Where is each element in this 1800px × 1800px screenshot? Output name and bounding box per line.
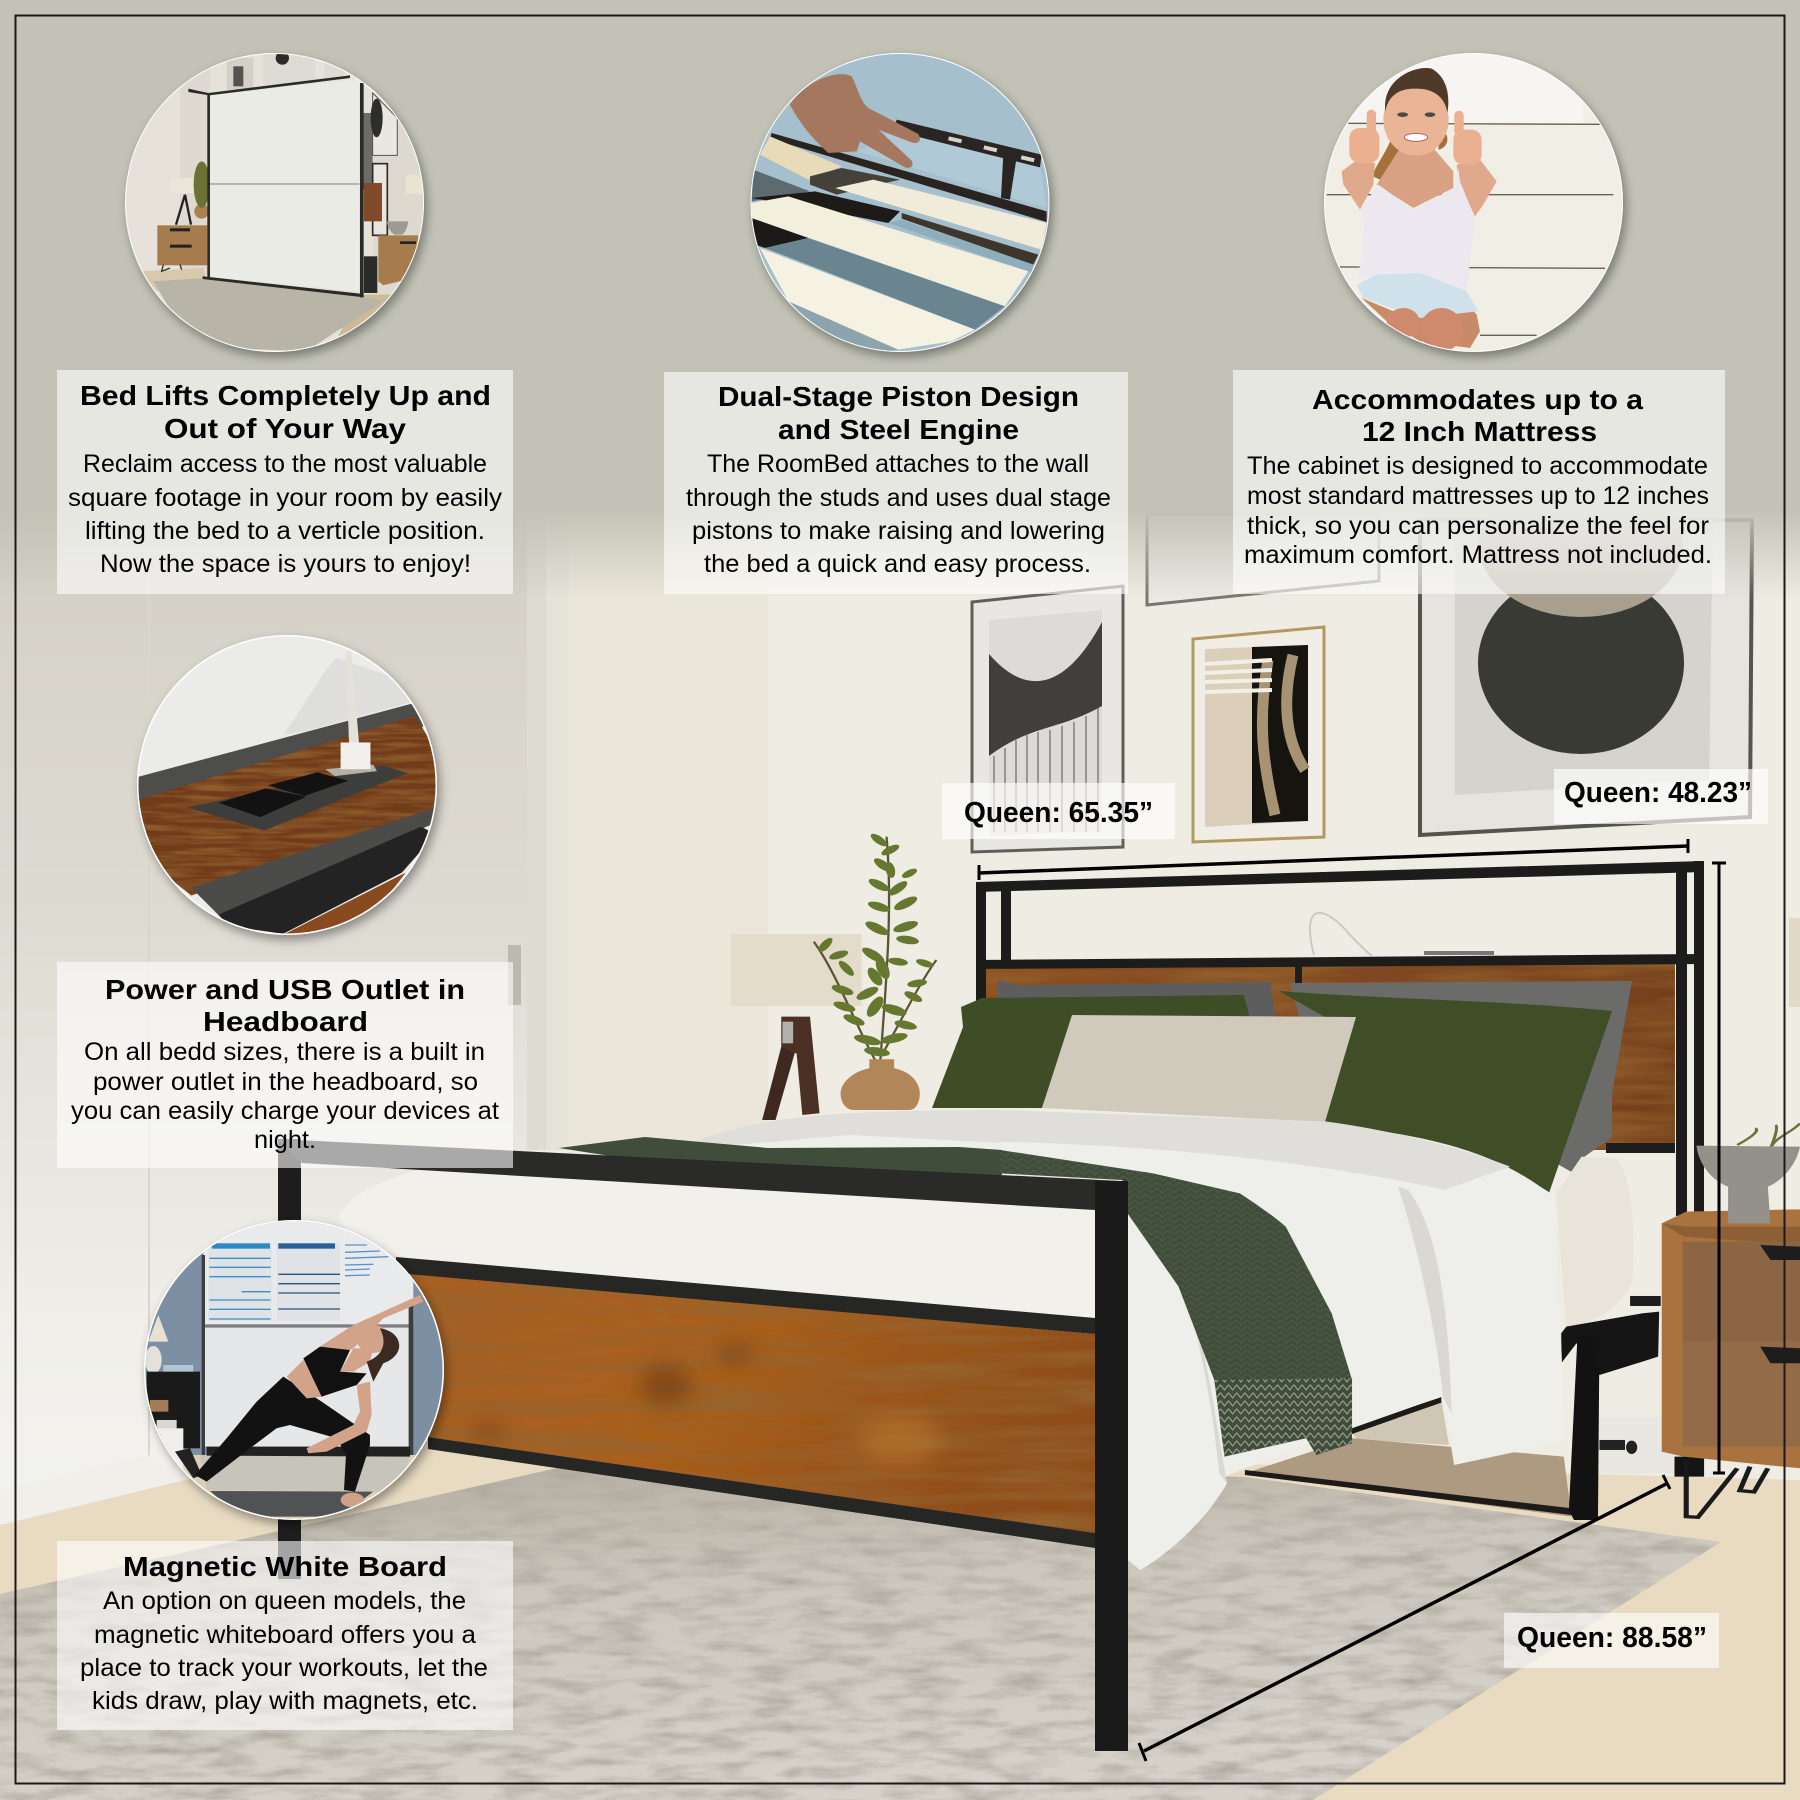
circle photo: slats and piston frame (745, 48, 1055, 358)
label: height dimension: Queen: 48.23” (1564, 777, 1752, 809)
body text: dual-stage piston: the bed a quick and easy process. (704, 550, 1091, 578)
heading: power outlet: Power and USB Outlet in (105, 974, 465, 1005)
body text: mattress: maximum comfort. Mattress not included. (1244, 541, 1712, 569)
duvet (339, 1110, 1564, 1570)
body text: magnetic white board: An option on queen models, the (103, 1587, 466, 1615)
heading: mattress (1312, 384, 1643, 447)
floor (0, 1440, 1800, 1800)
heading: mattress: 12 Inch Mattress (1362, 416, 1597, 447)
heading: bed lifts: Out of Your Way (164, 413, 406, 444)
heading: power outlet (105, 974, 465, 1037)
heading: magnetic white board: Magnetic White Board (123, 1551, 447, 1582)
circle photo: power outlet in headboard (134, 631, 440, 938)
body text: magnetic white board: magnetic whiteboard offers you a (94, 1621, 476, 1649)
label: height dimension (1554, 769, 1768, 824)
wall art: gold frame print (1193, 627, 1324, 842)
body text: power outlet (71, 1038, 499, 1154)
wall art: drip print (972, 586, 1123, 852)
edge lamp (1789, 918, 1800, 1007)
heading: bed lifts: Bed Lifts Completely Up and (80, 380, 491, 411)
body text: bed lifts: square footage in your room by easily (68, 484, 503, 512)
mattress and under-bed frame (1245, 1157, 1673, 1520)
footboard (277, 1139, 1128, 1751)
panel: bed lifts (57, 370, 513, 594)
label: length dimension: Queen: 88.58” (1517, 1622, 1707, 1654)
nightstand (1662, 1209, 1800, 1517)
body text: dual-stage piston: through the studs and uses dual stage (686, 484, 1111, 512)
wall art: large circle print (1420, 473, 1752, 835)
label: width dimension: Queen: 65.35” (964, 797, 1153, 829)
body text: power outlet: On all bedd sizes, there is a built in (84, 1038, 485, 1066)
body text: bed lifts (68, 450, 503, 578)
label: width dimension (942, 783, 1175, 839)
heading: power outlet: Headboard (203, 1006, 368, 1037)
body text: mattress: most standard mattresses up to 12 inches (1247, 482, 1709, 510)
dimension line: height (1712, 863, 1726, 1473)
body text: magnetic white board: place to track your workouts, let the (80, 1654, 488, 1682)
body text: dual-stage piston: The RoomBed attaches to the wall (707, 450, 1089, 478)
heading: dual-stage piston: and Steel Engine (778, 414, 1019, 445)
decorative vase (1696, 1123, 1800, 1223)
body text: dual-stage piston (686, 450, 1111, 578)
dimension line: width (979, 839, 1688, 880)
circle photo: bed lifted upright (120, 48, 430, 358)
heading: dual-stage piston (718, 381, 1079, 445)
body text: magnetic white board: kids draw, play with magnets, etc. (92, 1687, 478, 1715)
body text: power outlet: night. (254, 1126, 316, 1154)
label: length dimension (1504, 1613, 1719, 1668)
potted plant (814, 832, 936, 1110)
circle photo: woman with mattress (1320, 48, 1630, 358)
dimension line: length (1139, 1475, 1670, 1761)
body text: mattress: thick, so you can personalize the feel for (1247, 512, 1709, 540)
heading: mattress: Accommodates up to a (1312, 384, 1643, 415)
body text: bed lifts: Now the space is yours to enjoy! (100, 550, 471, 578)
heading: bed lifts (80, 380, 491, 444)
circle photo: yoga in front of magnetic whiteboard (140, 1215, 450, 1525)
body text: bed lifts: Reclaim access to the most valuable (83, 450, 487, 478)
table lamp (731, 934, 862, 1120)
body text: mattress: The cabinet is designed to accommodate (1247, 452, 1708, 480)
panel: mattress (1233, 370, 1725, 594)
body text: dual-stage piston: pistons to make raising and lowering (692, 517, 1105, 545)
panel: dual-stage piston (664, 372, 1128, 594)
heading: dual-stage piston: Dual-Stage Piston Design (718, 381, 1079, 412)
pillows (932, 980, 1632, 1193)
sage top band (0, 0, 1800, 600)
panel: power outlet (57, 962, 513, 1168)
area rug (0, 1468, 1721, 1800)
body text: mattress (1244, 452, 1712, 569)
throw blanket (559, 1137, 1352, 1457)
headboard (976, 861, 1704, 1216)
body text: bed lifts: lifting the bed to a verticle position. (85, 517, 485, 545)
body text: power outlet: power outlet in the headboard, so (93, 1068, 478, 1096)
body text: magnetic white board (80, 1587, 488, 1715)
body text: power outlet: you can easily charge your devices at (71, 1097, 499, 1125)
wall art: frame behind panel (1147, 514, 1379, 605)
panel: magnetic white board (57, 1541, 513, 1730)
